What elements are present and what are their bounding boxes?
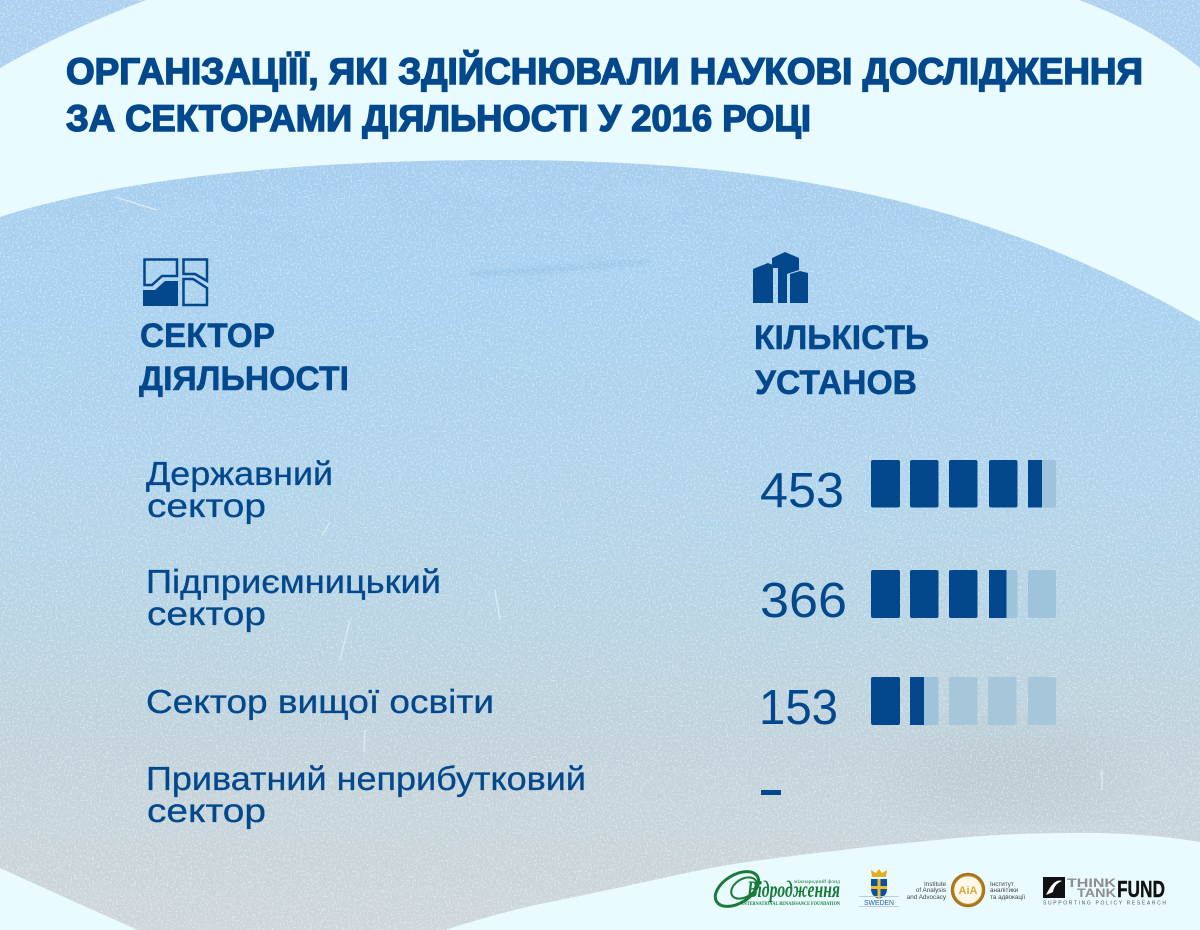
label: state sector: Державний — [146, 455, 333, 492]
icon: buildings — [753, 252, 808, 303]
logo: Think Tank Fund — [1043, 876, 1166, 906]
label: higher education sector: Сектор вищої освіти — [146, 683, 494, 720]
title: ЗА СЕКТОРАМИ ДІЯЛЬНОСТІ У 2016 РОЦІ — [66, 98, 811, 139]
logo: Think Tank Fund: FUND — [1117, 876, 1165, 902]
top-right corner shape — [1079, 0, 1200, 68]
row: private non-profit sector — [146, 760, 781, 829]
value: dash — [761, 790, 781, 795]
bar: 366 — [871, 570, 1056, 618]
logo: Institute of Analysis and Advocacy: AiA — [959, 885, 978, 897]
label: private non-profit sector: сектор — [147, 792, 266, 829]
row: state sector — [146, 455, 1056, 524]
label: private non-profit sector: Приватний неприбутковий — [146, 760, 586, 797]
logo: Institute of Analysis and Advocacy: аналітики — [990, 886, 1019, 894]
logo: Institute of Analysis and Advocacy: and Advocacy — [907, 894, 947, 901]
heading: sector of activity: СЕКТОР — [140, 317, 275, 355]
value: 366: 366 — [760, 574, 847, 628]
row: business sector — [146, 563, 1056, 632]
logo: Vidrodzhennia: INTERNATIONAL RENAISSANCE FOUNDATION — [742, 902, 840, 907]
bar: 153 — [871, 677, 1056, 725]
logo: Vidrodzhennia: міжнародний фонд — [794, 880, 841, 885]
heading: number of institutions: КІЛЬКІСТЬ — [754, 319, 929, 357]
value: 453: 453 — [760, 464, 844, 518]
heading: sector of activity — [139, 317, 349, 398]
logo: Vidrodzhennia: Відродження — [746, 877, 840, 902]
logo: Institute of Analysis and Advocacy: та адвокації — [990, 893, 1025, 901]
label: business sector: Підприємницький — [146, 563, 441, 600]
bar: 453 — [871, 460, 1056, 508]
logo: Sweden — [859, 869, 899, 907]
heading: number of institutions: УСТАНОВ — [755, 364, 917, 402]
label: state sector — [146, 455, 333, 524]
logo: Think Tank Fund: THINK — [1067, 878, 1117, 890]
logo: Institute of Analysis and Advocacy — [907, 874, 1025, 906]
logo: Institute of Analysis and Advocacy: Інститут — [990, 881, 1014, 888]
heading: sector of activity: ДІЯЛЬНОСТІ — [139, 360, 349, 398]
title: ОРГАНІЗАЦІЇЇ, ЯКІ ЗДІЙСНЮВАЛИ НАУКОВІ ДОСЛІДЖЕННЯ — [66, 50, 1143, 92]
label: state sector: сектор — [147, 487, 266, 524]
logo: Vidrodzhennia — [709, 864, 841, 914]
label: business sector: сектор — [147, 595, 266, 632]
label: private non-profit sector — [146, 760, 586, 829]
logo: Institute of Analysis and Advocacy: Institute — [924, 881, 946, 888]
label: business sector — [146, 563, 441, 632]
logo: Think Tank Fund: TANK — [1077, 888, 1117, 900]
heading: number of institutions — [754, 319, 929, 402]
row: higher education sector — [146, 677, 1056, 735]
icon: sector grid — [143, 260, 207, 306]
logo: Sweden: SWEDEN — [864, 900, 894, 907]
logo: Think Tank Fund: SUPPORTING POLICY RESEARCH — [1043, 900, 1166, 906]
value: 153: 153 — [759, 681, 838, 735]
title — [66, 50, 1143, 139]
top-left corner shape — [0, 0, 146, 68]
logo: Institute of Analysis and Advocacy: of Analysis — [916, 887, 946, 894]
